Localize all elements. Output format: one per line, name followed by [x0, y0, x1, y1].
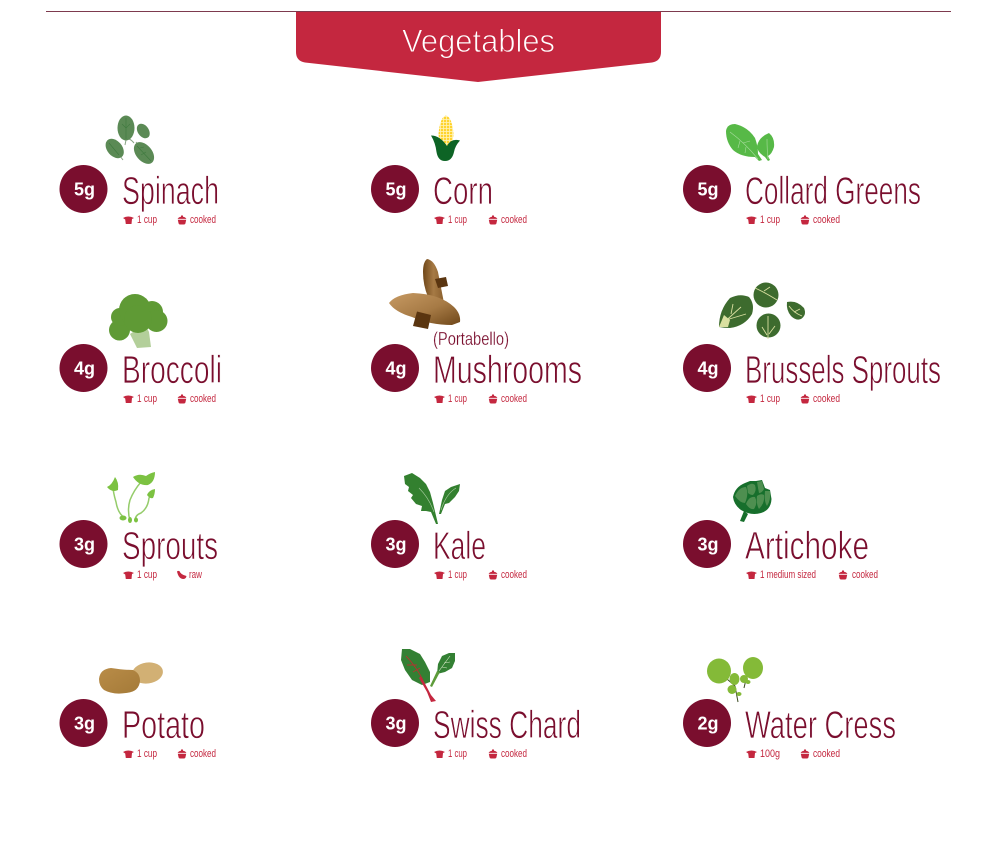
serving: 1 cup — [137, 569, 157, 581]
value badge: 5g — [697, 180, 719, 200]
value badge — [683, 344, 731, 392]
serving: cooked — [190, 748, 216, 760]
item: Spinach — [60, 116, 219, 226]
value badge — [60, 344, 108, 392]
serving — [123, 748, 216, 760]
serving — [123, 569, 202, 581]
item: Collard Greens — [683, 124, 921, 226]
value badge — [371, 165, 419, 213]
value badge — [683, 699, 731, 747]
name: Broccoli — [122, 349, 222, 392]
icon: artichoke — [733, 480, 772, 522]
serving: cooked — [190, 393, 216, 405]
icon: spinach — [102, 116, 158, 168]
value badge: 3g — [74, 714, 95, 734]
serving: 1 cup — [137, 214, 157, 226]
serving: 1 medium sized — [760, 569, 816, 581]
serving: cooked — [501, 214, 527, 226]
item: Potato — [60, 660, 216, 760]
serving: 1 cup — [137, 748, 157, 760]
icon: potatoes — [99, 660, 164, 694]
serving: cooked — [813, 393, 840, 405]
icon: kale — [404, 473, 460, 524]
heading: Vegetables — [402, 23, 555, 59]
value badge — [371, 344, 419, 392]
serving — [434, 214, 527, 226]
icon: broccoli — [109, 294, 168, 348]
item: Brussels Sprouts — [683, 282, 941, 405]
icon: collard greens — [726, 124, 774, 161]
serving: cooked — [813, 214, 840, 226]
item: Mushrooms — [371, 259, 582, 405]
serving: cooked — [501, 569, 527, 581]
value badge: 3g — [385, 714, 407, 734]
serving — [434, 748, 527, 760]
serving: cooked — [501, 748, 527, 760]
serving: raw — [189, 569, 202, 581]
item: Swiss Chard — [371, 649, 581, 760]
serving: 1 cup — [448, 569, 467, 581]
serving — [746, 393, 840, 405]
value badge — [371, 520, 419, 568]
icon: brussels sprouts — [719, 282, 805, 339]
value badge — [60, 165, 108, 213]
serving: 1 cup — [448, 393, 467, 405]
value badge: 4g — [697, 358, 719, 378]
name: Artichoke — [745, 525, 869, 568]
icon: corn — [431, 116, 460, 161]
value badge: 2g — [697, 714, 719, 734]
serving — [434, 393, 527, 405]
name: Swiss Chard — [433, 704, 581, 747]
serving: cooked — [501, 393, 527, 405]
name: Kale — [433, 525, 486, 568]
value badge: 4g — [385, 358, 407, 378]
serving: 100g — [760, 748, 780, 760]
value badge — [683, 165, 731, 213]
serving — [746, 748, 840, 760]
value badge — [60, 520, 108, 568]
top rule — [46, 11, 951, 12]
serving — [434, 569, 527, 581]
name: Mushrooms — [433, 349, 582, 392]
value badge — [60, 699, 108, 747]
item: Water Cress — [683, 657, 896, 760]
serving: cooked — [190, 214, 216, 226]
name: Water Cress — [745, 704, 896, 747]
icon: swiss chard — [401, 649, 455, 702]
banner: Vegetables — [296, 12, 661, 82]
value badge: 3g — [74, 534, 95, 554]
name: Collard Greens — [745, 170, 921, 213]
serving: 1 cup — [760, 214, 780, 226]
value badge — [371, 699, 419, 747]
serving: 1 cup — [448, 748, 467, 760]
item: Corn — [371, 116, 527, 226]
qualifier: (Portabello) — [433, 329, 509, 349]
item: Artichoke — [683, 480, 878, 581]
serving — [123, 214, 216, 226]
serving — [746, 569, 878, 581]
item: Kale — [371, 473, 527, 581]
name: Sprouts — [122, 525, 218, 568]
value badge: 5g — [74, 180, 95, 200]
item: Broccoli — [60, 294, 222, 405]
icon: portabello mushrooms — [389, 259, 460, 329]
serving: 1 cup — [760, 393, 780, 405]
icon: water cress — [707, 657, 763, 702]
value badge: 3g — [697, 534, 719, 554]
serving: 1 cup — [137, 393, 157, 405]
name: Spinach — [122, 170, 219, 213]
serving — [746, 214, 840, 226]
serving: 1 cup — [448, 214, 467, 226]
serving: cooked — [852, 569, 878, 581]
serving — [123, 393, 216, 405]
value badge: 5g — [385, 180, 407, 200]
value badge — [683, 520, 731, 568]
value badge: 4g — [74, 358, 95, 378]
icon: sprouts — [107, 472, 155, 523]
item: Sprouts — [60, 472, 218, 581]
name: Potato — [122, 704, 205, 747]
value badge: 3g — [385, 534, 407, 554]
name: Corn — [433, 170, 493, 213]
serving: cooked — [813, 748, 840, 760]
